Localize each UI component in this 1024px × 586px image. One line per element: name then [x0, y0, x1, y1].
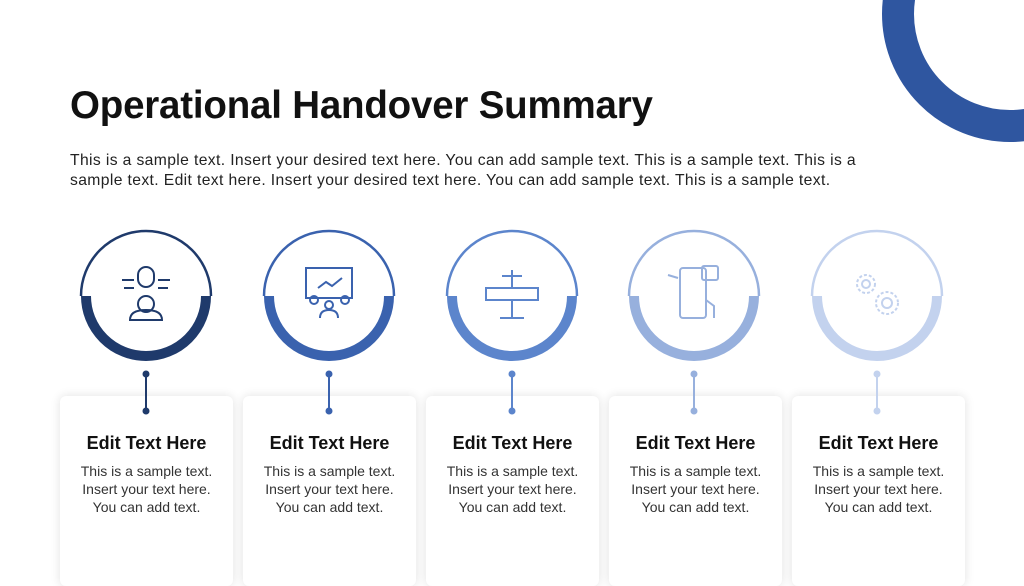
step 4 circle	[629, 231, 759, 414]
card 5: You can add text.	[825, 499, 932, 515]
card 4: Insert your text here.	[631, 481, 760, 497]
card 2	[243, 396, 416, 586]
icon: idea person	[122, 267, 170, 320]
icon: server network	[486, 270, 538, 318]
card 3: Insert your text here.	[448, 481, 577, 497]
icon: meeting presentation	[306, 268, 352, 318]
card 1: This is a sample text.	[81, 463, 212, 479]
card 4	[609, 396, 782, 586]
card 5: Edit Text Here	[819, 433, 938, 453]
title: Operational Handover Summary	[70, 84, 653, 127]
card 3	[426, 396, 599, 586]
card 2: Edit Text Here	[270, 433, 389, 453]
card 3: You can add text.	[459, 499, 566, 515]
icon: gears	[857, 275, 898, 314]
step 3 circle	[447, 231, 577, 414]
card 1: Edit Text Here	[87, 433, 206, 453]
card 5	[792, 396, 965, 586]
card 1	[60, 396, 233, 586]
card 4: You can add text.	[642, 499, 749, 515]
card 1: Insert your text here.	[82, 481, 211, 497]
card 2: You can add text.	[276, 499, 383, 515]
card 5: Insert your text here.	[814, 481, 943, 497]
card 4: Edit Text Here	[636, 433, 755, 453]
step 2 circle	[264, 231, 394, 414]
card 2: This is a sample text.	[264, 463, 395, 479]
description text: This is a sample text. Insert your desired text here. You can add sample text. This is a sample text. This is a sample text. Edit text here. Insert your desired text here. You can add sample text. This is a sample text.	[70, 152, 856, 189]
card 3: Edit Text Here	[453, 433, 572, 453]
step 5 circle	[812, 231, 942, 414]
icon: mobile marketing	[668, 266, 718, 318]
card 1: You can add text.	[93, 499, 200, 515]
card 4: This is a sample text.	[630, 463, 761, 479]
card 3: This is a sample text.	[447, 463, 578, 479]
step 1 circle	[81, 231, 211, 414]
card 5: This is a sample text.	[813, 463, 944, 479]
card 2: Insert your text here.	[265, 481, 394, 497]
